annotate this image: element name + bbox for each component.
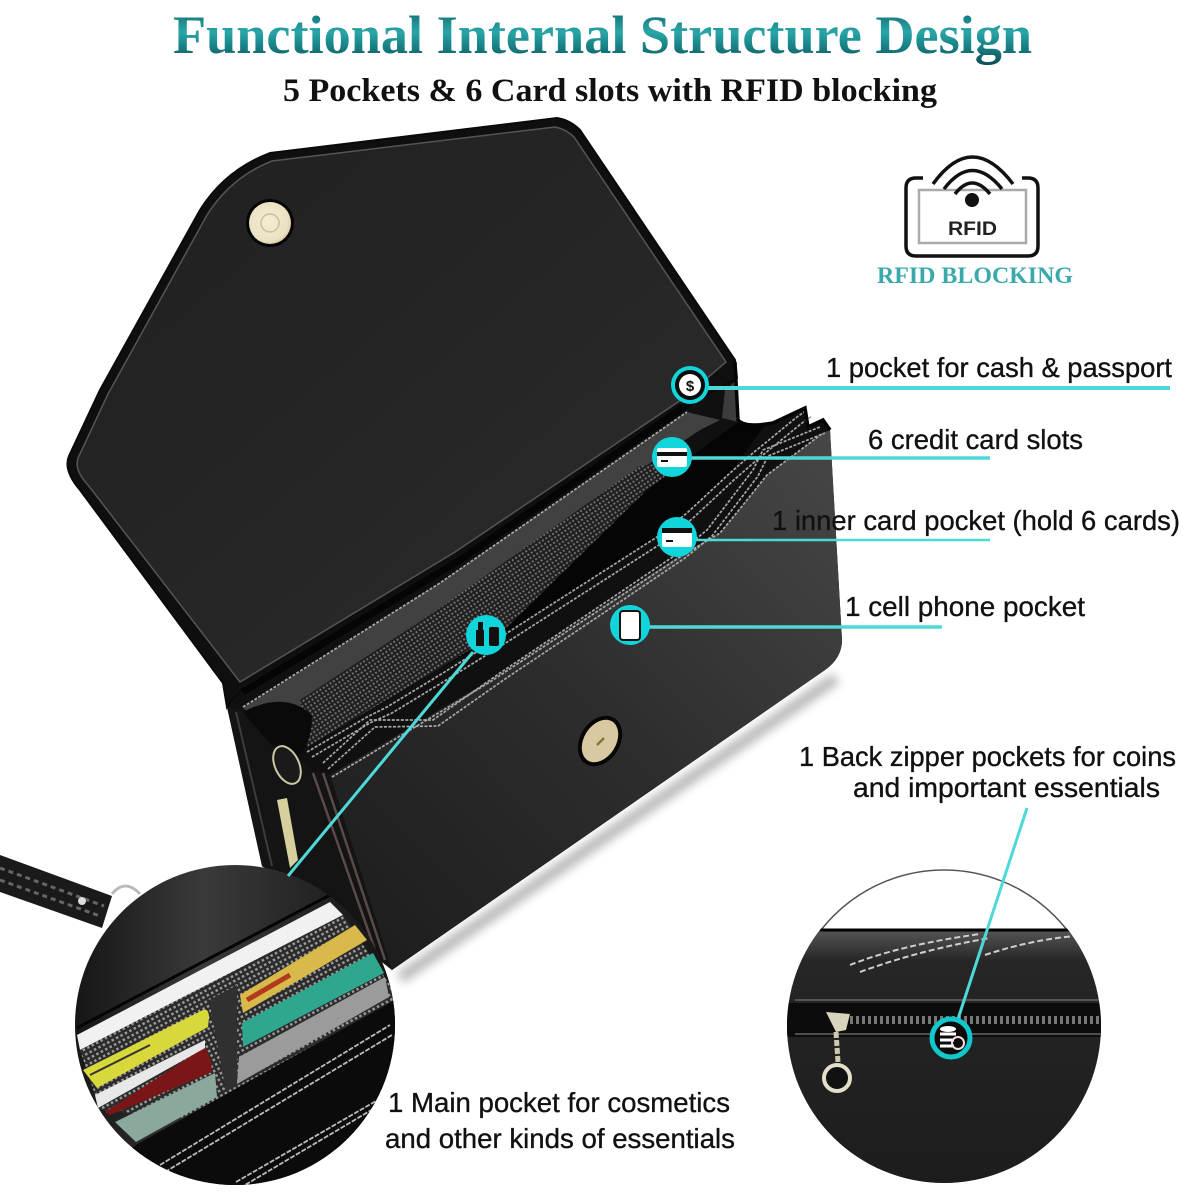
mesh pocket	[300, 460, 690, 747]
bag shadow	[400, 678, 836, 978]
side tab	[243, 702, 312, 762]
side gusset	[227, 707, 392, 970]
callout lines	[288, 388, 1170, 1022]
center column	[209, 985, 237, 1092]
icon: credit card slots	[652, 437, 692, 477]
title: Functional Internal Structure Design	[173, 5, 1032, 65]
icon: RFID badge: RFID	[948, 219, 997, 240]
label: back zipper pocket	[799, 741, 1176, 803]
icon: cash	[671, 366, 709, 404]
icon: coins	[932, 1019, 970, 1057]
icon: cosmetics	[466, 615, 506, 655]
line: phone pocket	[648, 625, 942, 629]
left detail circle: card slots	[75, 865, 395, 1188]
flap snap	[246, 199, 294, 247]
back panel	[785, 930, 1105, 1190]
label: main pocket: and other kinds of essentials	[385, 1123, 735, 1154]
icon: inner card pocket	[657, 517, 697, 557]
yellow card	[83, 1010, 209, 1088]
inner lining strip	[243, 412, 720, 730]
right detail circle: back zipper	[785, 868, 1105, 1190]
line: inner card pocket	[695, 539, 990, 541]
teal card	[242, 953, 384, 1047]
grey card	[237, 977, 389, 1084]
subtitle: 5 Pockets & 6 Card slots with RFID blocking	[283, 73, 938, 109]
gold card	[240, 925, 367, 1013]
line: card slots	[690, 456, 990, 460]
RFID blocking label: RFID BLOCKING	[877, 263, 1073, 288]
right gusset edge	[735, 362, 830, 430]
bag body	[227, 378, 842, 970]
zipper band	[785, 1003, 1105, 1037]
line: zipper pocket	[957, 808, 1027, 1022]
green grey card	[115, 1073, 217, 1142]
front panel	[330, 430, 842, 970]
mesh band	[80, 915, 395, 1120]
label: main pocket	[385, 1087, 735, 1154]
zipper pull	[824, 1012, 850, 1091]
white lining strip	[77, 902, 343, 1050]
black inner slot	[440, 422, 765, 668]
red card	[105, 1047, 212, 1115]
label: main pocket: 1 Main pocket for cosmetics	[388, 1087, 730, 1118]
wrist strap	[0, 855, 140, 928]
wallet illustration	[67, 118, 842, 970]
gusset panel near hinge	[722, 380, 738, 422]
label: back zipper pocket: and important essentials	[853, 772, 1160, 803]
icon: cash: $	[686, 378, 695, 395]
line: cash pocket	[708, 386, 1170, 390]
flap fold shadow	[243, 405, 687, 692]
black pocket with stitching	[132, 1001, 395, 1185]
icon: RFID badge	[906, 157, 1038, 256]
label: back zipper pocket: 1 Back zipper pockets for coins	[799, 741, 1176, 772]
label: phone pocket: 1 cell phone pocket	[845, 591, 1085, 622]
flap	[67, 118, 737, 707]
flap inner surface	[77, 127, 726, 682]
pocket stitching	[243, 410, 825, 777]
icon: phone	[610, 605, 650, 645]
front snap	[569, 708, 631, 774]
zipper pull	[268, 742, 306, 868]
label: credit card slots: 6 credit card slots	[868, 424, 1083, 455]
label: cash pocket: 1 pocket for cash & passport	[826, 352, 1172, 383]
line: main pocket	[288, 652, 473, 876]
label: inner card pocket: 1 inner card pocket (hold 6 cards)	[772, 505, 1180, 536]
